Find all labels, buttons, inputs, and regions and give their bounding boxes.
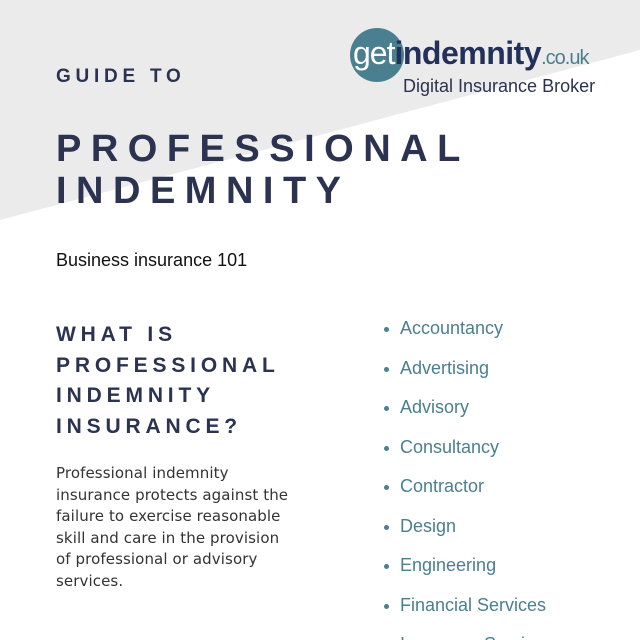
body text [56,464,288,590]
title [56,128,470,212]
body text: services. [56,572,123,590]
logo text: getindemnity.co.uk [353,35,588,71]
tagline: Business insurance 101 [56,250,247,270]
body text: insurance protects against the [56,486,288,504]
list: professions: Accountancy [400,318,503,338]
title: INDEMNITY [56,170,350,212]
list: professions: Design [400,516,456,536]
body text: skill and care in the provision [56,528,279,546]
body text: Professional indemnity [56,464,229,482]
body text: failure to exercise reasonable [56,507,281,525]
list: professions: Engineering [400,555,496,575]
logo tagline: Digital Insurance Broker [403,76,595,96]
list: professions: Consultancy [400,436,499,456]
logo [350,28,595,96]
title: PROFESSIONAL [56,128,470,170]
section heading: WHAT IS [56,323,177,346]
section heading [56,323,280,438]
list: professions [384,318,553,640]
body text: of professional or advisory [56,550,258,568]
list: professions: Advertising [400,358,489,378]
list: professions: Advisory [400,397,469,417]
section heading: INSURANCE? [56,414,242,438]
section heading: INDEMNITY [56,384,215,407]
list: professions: Contractor [400,476,484,496]
icon: logo circle [350,28,404,82]
section heading: PROFESSIONAL [56,354,280,376]
list: professions: Financial Services [400,594,546,614]
subtitle: guide to: GUIDE TO [56,66,186,87]
